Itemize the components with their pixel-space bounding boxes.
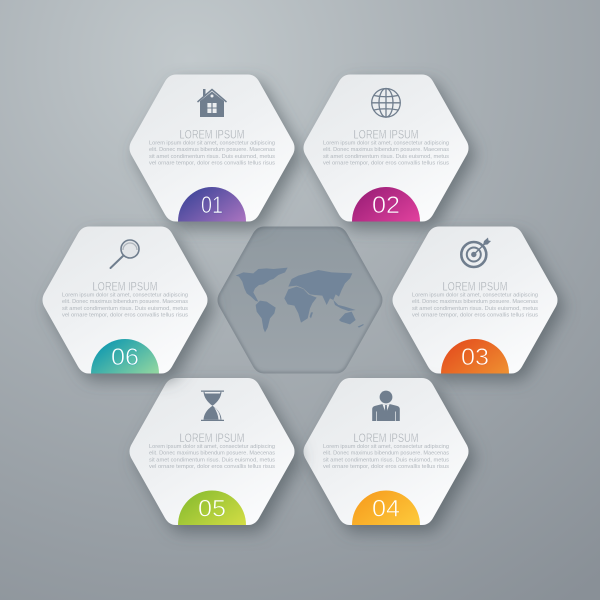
number badge 04 (352, 490, 420, 525)
panel: centre hexagon with world map (218, 226, 382, 374)
text block: Lorem ipsum dolor sit amet, consectetur adipiscing (323, 444, 449, 450)
text block: elit. Donec maximus bibendum posuere. Maecenas (323, 451, 449, 457)
text block (323, 444, 449, 470)
icon: businessman (372, 391, 400, 421)
panel: card 02 (304, 74, 468, 222)
card shape (42, 226, 208, 374)
icon: globe (372, 88, 400, 117)
title: LOREM IPSUM (442, 281, 508, 293)
number badge 05 (178, 490, 246, 525)
text block (149, 140, 275, 166)
text block: vel ornare tempor, dolor eros convallis tellus risus (323, 464, 449, 470)
panel: card 06 (42, 226, 208, 374)
icon: magnifier (110, 240, 139, 268)
centre hexagon recess (218, 226, 382, 374)
number badge 02: 02 (372, 192, 400, 219)
number badge 04: 04 (372, 496, 400, 522)
text block: sit amet condimentum risus. Duis euismod, metus (412, 306, 538, 312)
text block: Lorem ipsum dolor sit amet, consectetur adipiscing (62, 292, 188, 298)
text block: Lorem ipsum dolor sit amet, consectetur adipiscing (412, 292, 538, 298)
text block (323, 140, 449, 166)
title: LOREM IPSUM (354, 433, 418, 445)
text block: sit amet condimentum risus. Duis euismod, metus (323, 457, 449, 463)
panel: card 01 (130, 74, 294, 222)
text block: vel ornare tempor, dolor eros convallis tellus risus (62, 312, 188, 318)
text block: vel ornare tempor, dolor eros convallis tellus risus (149, 160, 275, 166)
text block: elit. Donec maximus bibendum posuere. Maecenas (149, 451, 275, 457)
text block: vel ornare tempor, dolor eros convallis tellus risus (412, 312, 538, 318)
number badge 03 (441, 339, 509, 374)
number badge 05: 05 (198, 496, 226, 522)
text block (412, 292, 538, 318)
text block: Lorem ipsum dolor sit amet, consectetur adipiscing (149, 140, 275, 146)
panel: card 04 (304, 378, 468, 525)
card shape (130, 74, 294, 222)
text block (62, 292, 188, 318)
number badge 02 (352, 187, 420, 222)
card shape (304, 378, 468, 525)
text block: elit. Donec maximus bibendum posuere. Maecenas (412, 299, 538, 305)
text block: vel ornare tempor, dolor eros convallis tellus risus (323, 160, 449, 166)
card shape (392, 226, 558, 374)
title: LOREM IPSUM (180, 433, 244, 445)
title: LOREM IPSUM (180, 129, 244, 141)
icon: house (198, 89, 226, 117)
text block: elit. Donec maximus bibendum posuere. Maecenas (149, 147, 275, 153)
text block: vel ornare tempor, dolor eros convallis tellus risus (149, 464, 275, 470)
number badge 06 (91, 339, 159, 374)
panel: card 03 (392, 226, 558, 374)
icon: target (461, 238, 491, 267)
text block: sit amet condimentum risus. Duis euismod, metus (149, 457, 275, 463)
text block: sit amet condimentum risus. Duis euismod, metus (62, 306, 188, 312)
text block: Lorem ipsum dolor sit amet, consectetur adipiscing (149, 444, 275, 450)
icon: hourglass (201, 390, 224, 421)
panel: card 05 (130, 378, 294, 525)
text block: sit amet condimentum risus. Duis euismod, metus (149, 154, 275, 160)
text block: Lorem ipsum dolor sit amet, consectetur adipiscing (323, 140, 449, 146)
number badge 03: 03 (461, 344, 489, 371)
title: LOREM IPSUM (92, 281, 158, 293)
text block: elit. Donec maximus bibendum posuere. Maecenas (62, 299, 188, 305)
card shape (130, 378, 294, 525)
text block: elit. Donec maximus bibendum posuere. Maecenas (323, 147, 449, 153)
world map (236, 268, 364, 332)
text block: sit amet condimentum risus. Duis euismod, metus (323, 154, 449, 160)
title: LOREM IPSUM (354, 129, 418, 141)
number badge 01 (178, 187, 246, 222)
card shape (304, 74, 468, 222)
number badge 01: 01 (201, 192, 223, 219)
number badge 06: 06 (111, 344, 139, 371)
text block (149, 444, 275, 470)
